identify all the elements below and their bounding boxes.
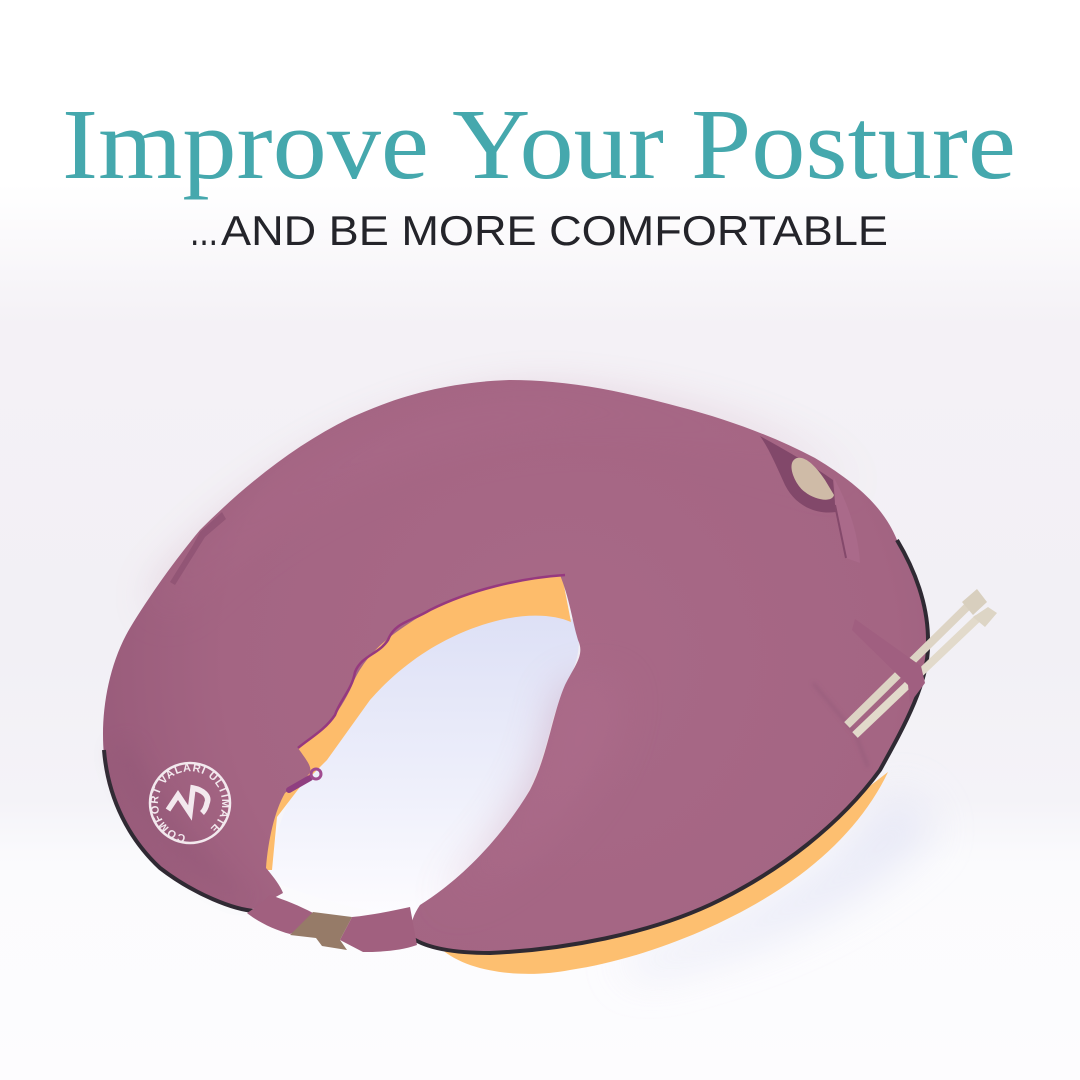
subtitle: ... [190,207,218,254]
title: Improve Your Posture [62,88,1016,200]
buckle [290,912,352,950]
opening behind pillow [268,615,579,915]
knitting needles [847,589,997,735]
nursing pillow [102,376,997,974]
black piping left [104,750,272,911]
lower pocket seam [813,683,868,767]
fabric shading [150,395,860,610]
yellow underside: inner band [262,565,571,870]
pillow body [103,380,928,953]
zipper pull [289,769,321,790]
soft shadow under pillow [620,790,935,975]
logo badge: COMFORT VALARI ULTIMATE [151,764,229,841]
yellow underside: lower edge [440,772,888,974]
black piping right and bottom [412,540,928,953]
phone pocket [760,436,860,563]
subtitle: AND BE MORE COMFORTABLE [221,207,888,254]
side tag [170,512,226,585]
needle elastic strap [852,619,925,703]
buckle strap [247,895,417,952]
zipper edge [298,575,565,748]
